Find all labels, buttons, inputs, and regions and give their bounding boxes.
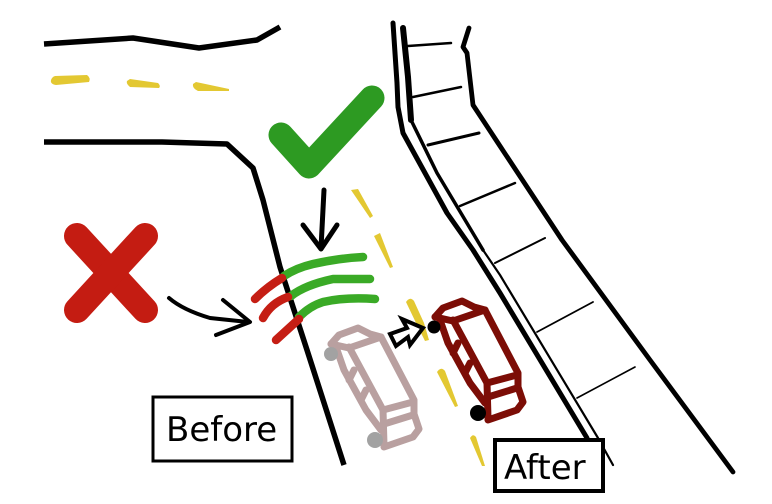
gray wheels <box>324 347 383 448</box>
label: After <box>495 440 603 491</box>
side road upper edge <box>44 27 280 48</box>
side road centre dashes <box>51 75 229 91</box>
main road centre dashes <box>351 189 485 466</box>
label: After: After <box>504 448 586 488</box>
right road edges <box>393 23 733 472</box>
car: after position <box>435 301 523 420</box>
green trajectories <box>284 257 375 317</box>
label: Before: Before <box>166 410 277 450</box>
arrow: outline shift arrow <box>390 319 423 346</box>
arrow: from check to lines <box>303 190 337 249</box>
red trajectories <box>255 278 299 340</box>
guard rail ticks <box>408 43 635 398</box>
label: Before <box>153 397 292 461</box>
icon: green check mark <box>281 98 372 166</box>
arrow: from cross to lines <box>169 298 250 335</box>
car: before position <box>331 328 419 447</box>
black wheels <box>428 320 486 421</box>
side road lower edge and main road left edge <box>44 142 344 465</box>
icon: red cross <box>77 236 145 310</box>
